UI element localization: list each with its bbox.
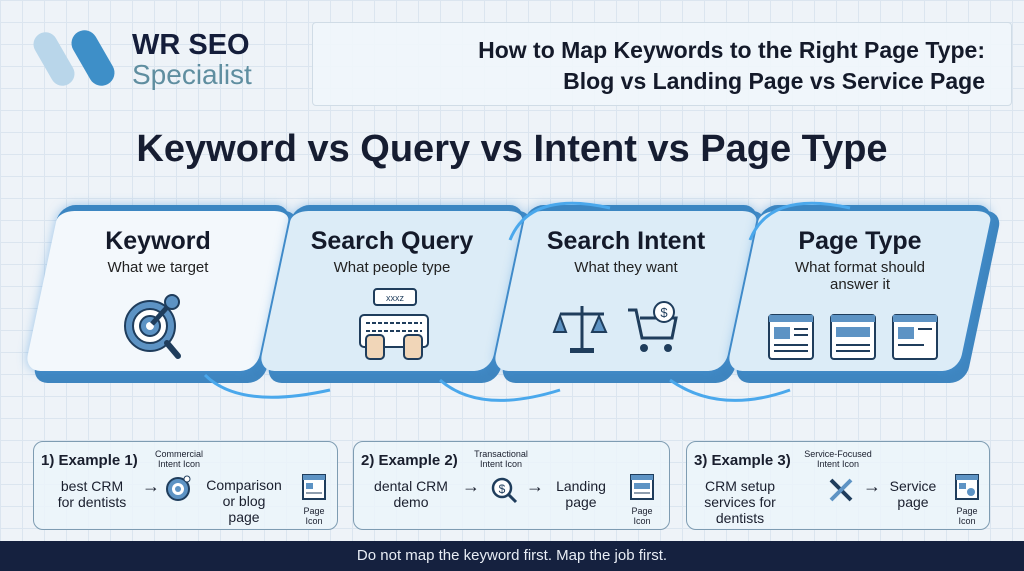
card: keyword: Keyword [105,227,211,255]
card: search intent [490,198,762,383]
card: page type: Page Type [798,227,922,255]
logo text: WR SEO [132,29,250,61]
example 3: CRM setup [705,478,775,494]
example 1: for dentists [58,494,126,510]
icon: page [955,474,979,500]
header title box: Blog vs Landing Page vs Service Page [563,68,985,94]
example 2: → [462,476,480,496]
card: page type: answer it [830,276,890,293]
icon: scale and cart [552,301,678,353]
example 2: Transactional [474,449,528,459]
icon: commercial target [166,476,190,501]
card: search intent: What they want [574,259,678,276]
example 2: Intent Icon [480,459,522,469]
logo text [132,29,252,90]
example 3: page [897,494,929,510]
example 3: → [863,476,881,496]
example 2 [353,441,670,530]
logo [34,29,252,90]
example 1: Page [303,506,325,516]
card: page type [724,198,1000,383]
example 3 [686,441,990,530]
example 1: or blog [223,493,265,509]
header title box [312,22,1012,106]
card: search query: Search Query [311,227,473,255]
example 2: → [526,476,544,496]
main heading: Keyword vs Query vs Intent vs Page Type [136,128,888,170]
example 2: dental CRM [374,478,448,494]
icon: keyboard: xxxz [386,293,404,303]
icon: dollar search: $ [499,482,506,496]
footer caption bar: Do not map the keyword first. Map the job first. [357,547,667,564]
example 3: 3) Example 3) [694,452,791,469]
example 3: Page [956,506,978,516]
example 2: page [565,494,597,510]
icon: keyboard [359,288,429,360]
example 1: Intent Icon [158,459,200,469]
example 1 [33,441,338,530]
icon: page [630,474,654,500]
card: keyword [22,198,294,383]
example 1: Icon [305,516,322,526]
example 1: best CRM [61,478,123,494]
card: search intent: Search Intent [547,227,705,255]
icon: target [124,294,181,359]
example 2: 2) Example 2) [361,452,458,469]
icon: page [302,474,326,500]
arrows: flow connectors [204,202,850,402]
icon: logo marks [29,28,79,90]
example 2: demo [393,494,429,510]
example 1: 1) Example 1) [41,452,138,469]
example 3: Service-Focused [804,449,872,459]
example 2: Landing [556,478,606,494]
card: page type: What format should [795,259,925,276]
example 2: Page [631,506,653,516]
example 3: services for [704,494,776,510]
card: search query [256,198,528,383]
header title box: How to Map Keywords to the Right Page Type: [478,37,985,63]
card: keyword: What we target [108,259,208,276]
example 1: page [228,509,260,525]
icon: scale and cart: $ [660,305,668,320]
example 3: Service [890,478,936,494]
footer caption bar [0,541,1024,571]
example 1: → [142,476,160,496]
example 1: Commercial [155,449,203,459]
example 3: Intent Icon [817,459,859,469]
icon: tools [830,478,852,502]
card: search query: What people type [334,259,450,276]
icon: page layouts [768,314,938,360]
example 2: Icon [633,516,650,526]
example 1: Comparison [206,477,282,493]
example 3: dentists [716,510,764,526]
icon: dollar search [492,478,517,503]
logo text: Specialist [132,59,252,90]
example 3: Icon [958,516,976,526]
